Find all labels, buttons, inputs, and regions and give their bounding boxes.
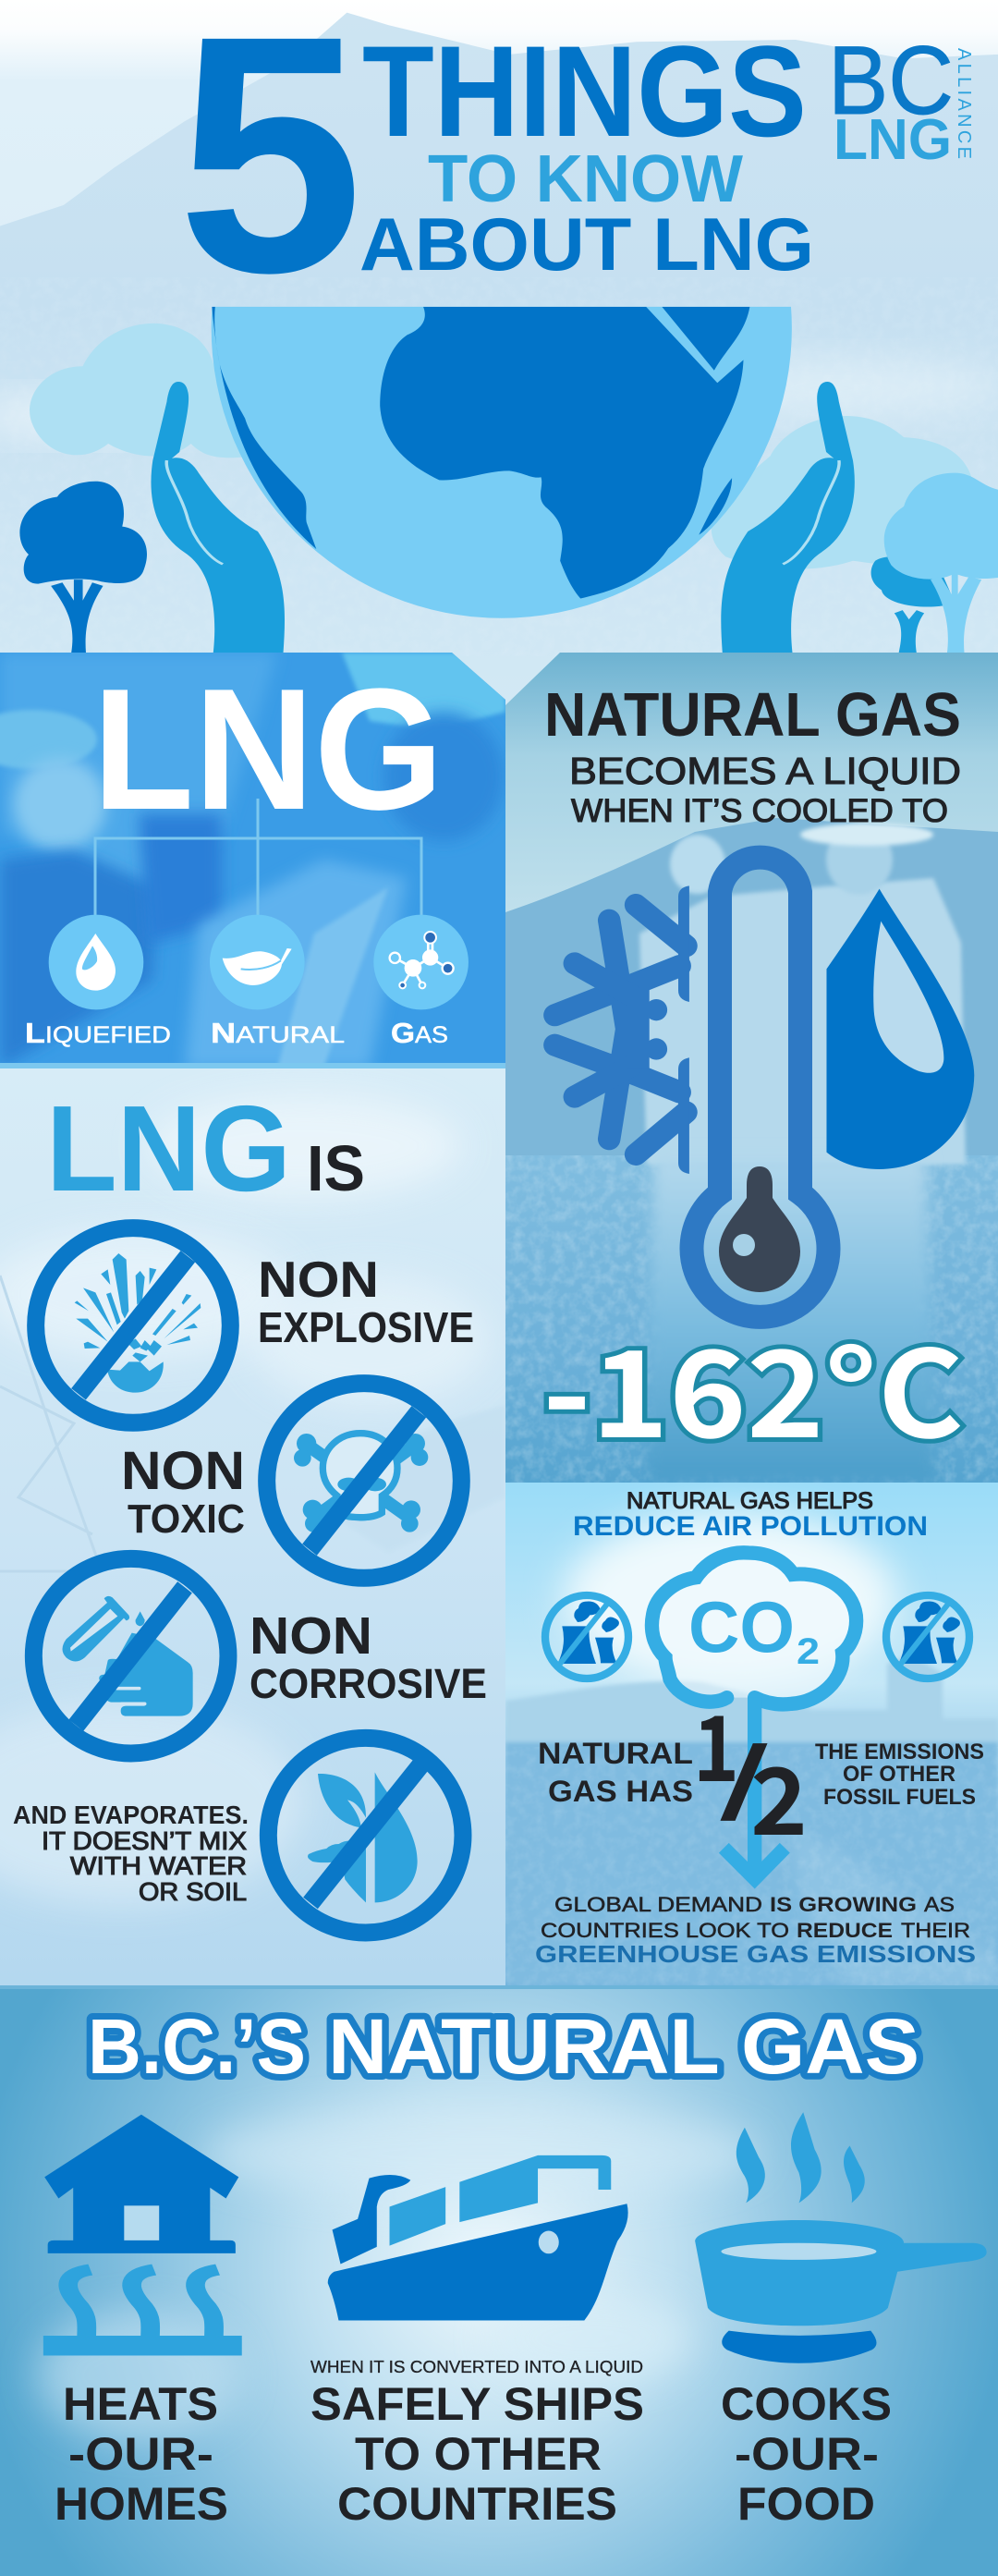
text: global demand: THEIR — [901, 1919, 970, 1942]
text: natural gas has — [538, 1737, 693, 1808]
heading: B.C.'s natural gas — [88, 2003, 919, 2090]
trees right — [871, 473, 998, 653]
icon: no explosion — [36, 1228, 230, 1422]
text: global demand: AS — [924, 1893, 955, 1916]
hand left — [151, 382, 285, 653]
icon: no smokestacks left — [545, 1595, 628, 1679]
text: the emissions: OF OTHER — [843, 1762, 955, 1787]
icon: thermometer — [691, 858, 828, 1317]
text: and evaporates: AND EVAPORATES. — [13, 1801, 249, 1829]
fraction: one half: / — [722, 1726, 767, 1841]
text: and evaporates: IT DOESN’T MIX — [42, 1826, 247, 1855]
text: CO2: CO — [688, 1586, 795, 1667]
temperature: -162°C: -162°C — [542, 1299, 964, 1472]
label: non toxic: TOXIC — [128, 1496, 245, 1542]
logo: BC LNG Alliance: BC — [828, 27, 954, 135]
panel: B.C.'s natural gas — [0, 1985, 998, 2576]
text: when converted, safely ships: SAFELY SHIPS — [310, 2378, 644, 2430]
fraction: one half: 2 — [750, 1728, 808, 1862]
continent: Africa — [380, 307, 749, 599]
label: non corrosive — [250, 1606, 487, 1707]
title: 5 things to know about LNG: THINGS — [362, 18, 807, 164]
arrow down — [724, 1698, 785, 1879]
heading: B.C.'s natural gas: B.C.’S — [88, 2003, 306, 2090]
heading: LNG: LNG — [92, 653, 444, 846]
icon: no corrosive — [33, 1558, 228, 1753]
text: natural gas has: GAS HAS — [548, 1775, 693, 1808]
panel: reduce air pollution — [505, 1483, 998, 1985]
label: Liquefied: LIQUEFIED — [25, 1017, 171, 1049]
icon: house with heat — [43, 2115, 242, 2355]
heading: reduce air pollution: REDUCE AIR POLLUTION — [573, 1511, 928, 1542]
text: when converted, safely ships — [310, 2358, 644, 2530]
logo: BC LNG Alliance: LNG — [834, 108, 952, 172]
house — [44, 2115, 238, 2253]
text: the emissions: THE EMISSIONS — [815, 1740, 984, 1764]
CO2 cloud and arrow — [651, 1553, 857, 1879]
text: global demand: GLOBAL DEMAND — [554, 1893, 762, 1916]
tree left — [19, 482, 147, 653]
heading: IS: IS — [307, 1132, 365, 1204]
globe — [211, 307, 792, 618]
text: heats our homes: -OUR- — [68, 2428, 213, 2480]
text: and evaporates: OR SOIL — [139, 1877, 247, 1906]
subheading: when it's cooled to: WHEN IT’S COOLED TO — [571, 793, 948, 829]
icon: leaf — [210, 915, 305, 1009]
text: cooks our food — [721, 2378, 892, 2530]
text: when converted, safely ships: TO OTHER — [355, 2428, 602, 2480]
text: cooks our food: COOKS — [721, 2378, 892, 2430]
panel: natural gas cooled — [505, 653, 998, 1483]
text: cooks our food: FOOD — [737, 2478, 875, 2530]
connector lines — [95, 799, 421, 915]
cloud outline — [651, 1553, 857, 1704]
burner — [722, 2331, 876, 2363]
text: global demand: COUNTRIES LOOK TO — [541, 1919, 789, 1942]
cloud right — [712, 416, 974, 569]
text: cooks our food: -OUR- — [735, 2428, 879, 2480]
fraction: one half: 1 — [693, 1677, 739, 1808]
hand right — [721, 382, 855, 653]
heading: LNG: LNG — [46, 1080, 291, 1216]
icon: no smokestacks right — [886, 1595, 969, 1679]
illustration: globe held by hands with trees — [19, 307, 998, 653]
text: global demand: GREENHOUSE GAS EMISSIONS — [535, 1940, 976, 1968]
heading: natural gas: NATURAL GAS — [544, 680, 961, 750]
heading: B.C.'s natural gas: NATURAL GAS — [328, 2003, 919, 2090]
logo: BC LNG Alliance: ALLIANCE — [954, 48, 974, 159]
logo: BC LNG Alliance — [828, 27, 974, 172]
label: non explosive — [258, 1251, 474, 1351]
heading: natural gas helps: NATURAL GAS HELPS — [627, 1488, 873, 1514]
pot — [695, 2220, 987, 2326]
label: non explosive: NON — [258, 1251, 379, 1308]
text: and evaporates: WITH WATER — [70, 1851, 247, 1880]
continent: Madagascar — [699, 478, 732, 535]
icon: LNG ship — [328, 2155, 628, 2321]
icon: steaming pot — [695, 2112, 987, 2363]
text: when converted, safely ships: WHEN IT IS CONVERTED INTO A LIQUID — [310, 2358, 643, 2376]
label: Natural: NATURAL — [211, 1017, 345, 1049]
panel: LNG acronym — [0, 653, 505, 1068]
label: non explosive: EXPLOSIVE — [258, 1303, 474, 1351]
fraction: one half — [693, 1677, 808, 1862]
text: heats our homes — [55, 2378, 228, 2530]
title: 5 things to know about LNG — [177, 0, 814, 343]
label: non toxic — [121, 1441, 245, 1542]
label: non toxic: NON — [121, 1441, 245, 1501]
text: heats our homes: HOMES — [55, 2478, 228, 2530]
heat waves — [68, 2270, 218, 2337]
continent: left coast — [212, 307, 316, 549]
text: global demand: REDUCE — [797, 1919, 893, 1942]
text: CO2: 2 — [797, 1631, 820, 1672]
text: natural gas has: NATURAL — [538, 1737, 693, 1770]
text: heats our homes: HEATS — [63, 2378, 218, 2430]
label: non corrosive: CORROSIVE — [250, 1660, 487, 1707]
subheading: becomes a liquid: BECOMES A LIQUID — [569, 750, 961, 792]
text: and evaporates — [13, 1801, 249, 1906]
label: non corrosive: NON — [250, 1606, 372, 1666]
background: mountain header — [0, 0, 998, 739]
icon: liquid drop — [49, 915, 143, 1009]
text: the emissions: FOSSIL FUELS — [823, 1785, 976, 1810]
text: when converted, safely ships: COUNTRIES — [337, 2478, 617, 2530]
cloud left — [30, 324, 255, 458]
thermometer mercury — [719, 1166, 800, 1292]
text: global demand — [535, 1893, 976, 1968]
title: 5 things to know about LNG: TO KNOW — [428, 142, 743, 216]
label: Gas: GAS — [391, 1017, 448, 1049]
text: the emissions — [815, 1740, 984, 1810]
icon: gas molecule — [373, 915, 469, 1009]
icon: snowflake — [554, 885, 689, 1174]
panel: LNG is — [0, 1068, 505, 1985]
title: 5 things to know about LNG: ABOUT LNG — [359, 203, 814, 287]
text: global demand: IS GROWING — [770, 1893, 917, 1916]
steam — [736, 2112, 865, 2203]
icon: no toxic skull — [267, 1384, 461, 1578]
icon: no soil or water mix — [268, 1738, 463, 1933]
icon: liquid drop — [826, 889, 974, 1169]
